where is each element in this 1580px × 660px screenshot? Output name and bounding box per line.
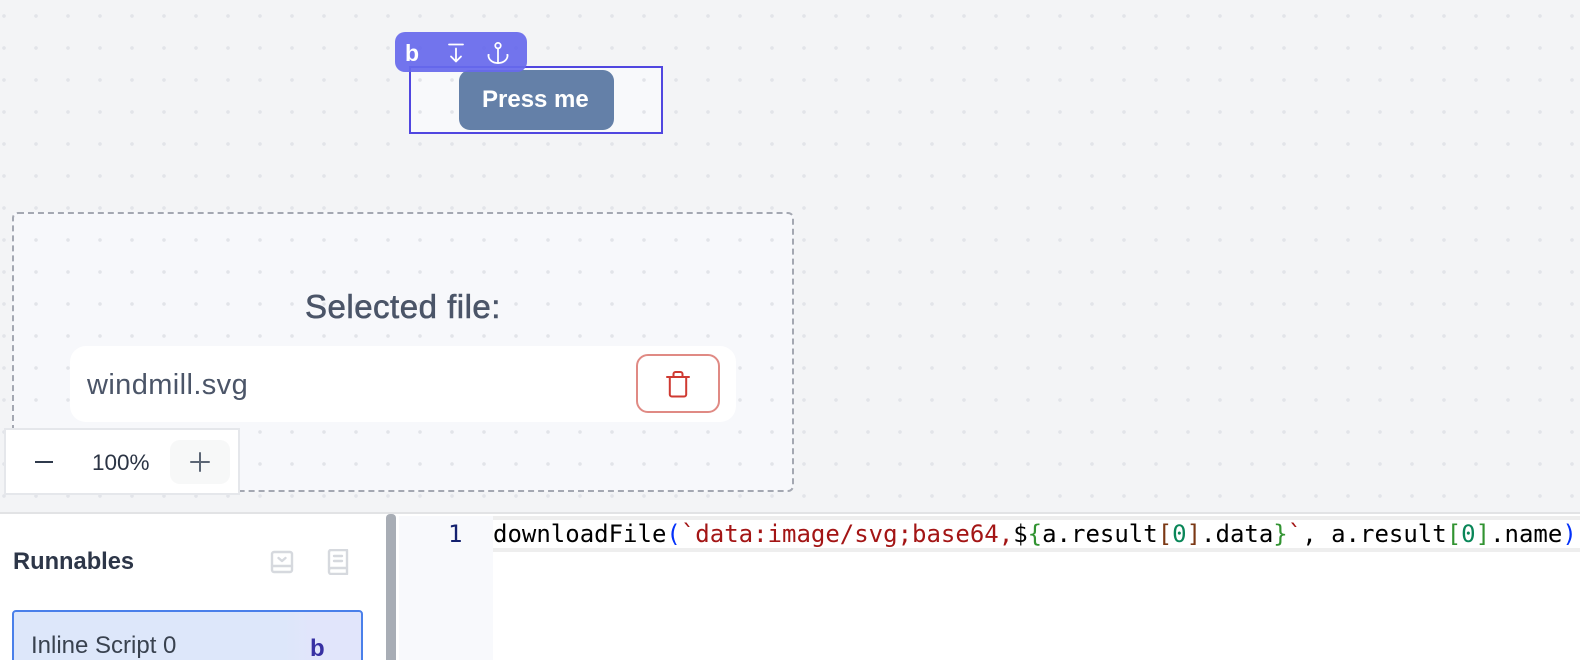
editor gutter <box>399 516 493 660</box>
zoom level: 100% <box>92 450 150 475</box>
file row <box>70 346 736 422</box>
button: zoom in <box>170 440 230 484</box>
button: delete file <box>636 354 720 413</box>
code line <box>493 516 1580 552</box>
line number: 1 <box>448 520 462 548</box>
icon: plus <box>190 452 210 472</box>
icon: trash <box>666 371 690 398</box>
heading: runnables: Runnables <box>13 549 134 575</box>
code text: downloadFile(`data:image/svg;base64,${a.result[0].data}`, a.result[0].name) <box>493 520 1577 548</box>
button label: Press me <box>482 86 589 113</box>
icon: book <box>328 549 348 575</box>
zoom control <box>4 428 240 495</box>
icon: anchor <box>488 42 508 64</box>
component selection outline <box>409 66 663 134</box>
panel: runnables sidebar <box>0 515 386 660</box>
heading: selected file: Selected file: <box>305 288 501 325</box>
component toolbar <box>395 32 527 72</box>
splitter handle <box>386 514 396 660</box>
script name: Inline Script 0 <box>31 632 176 659</box>
panel: file input dropzone <box>12 212 794 492</box>
canvas: dotted app preview <box>0 0 1580 514</box>
icon: zoom out <box>35 461 53 463</box>
file name: windmill.svg <box>87 369 248 401</box>
button: Press me <box>459 70 614 130</box>
icon: move down <box>448 44 464 62</box>
toolbar label: b: b <box>405 40 419 66</box>
icon: collapse panel <box>270 550 294 574</box>
runnable item: inline script <box>12 610 363 660</box>
